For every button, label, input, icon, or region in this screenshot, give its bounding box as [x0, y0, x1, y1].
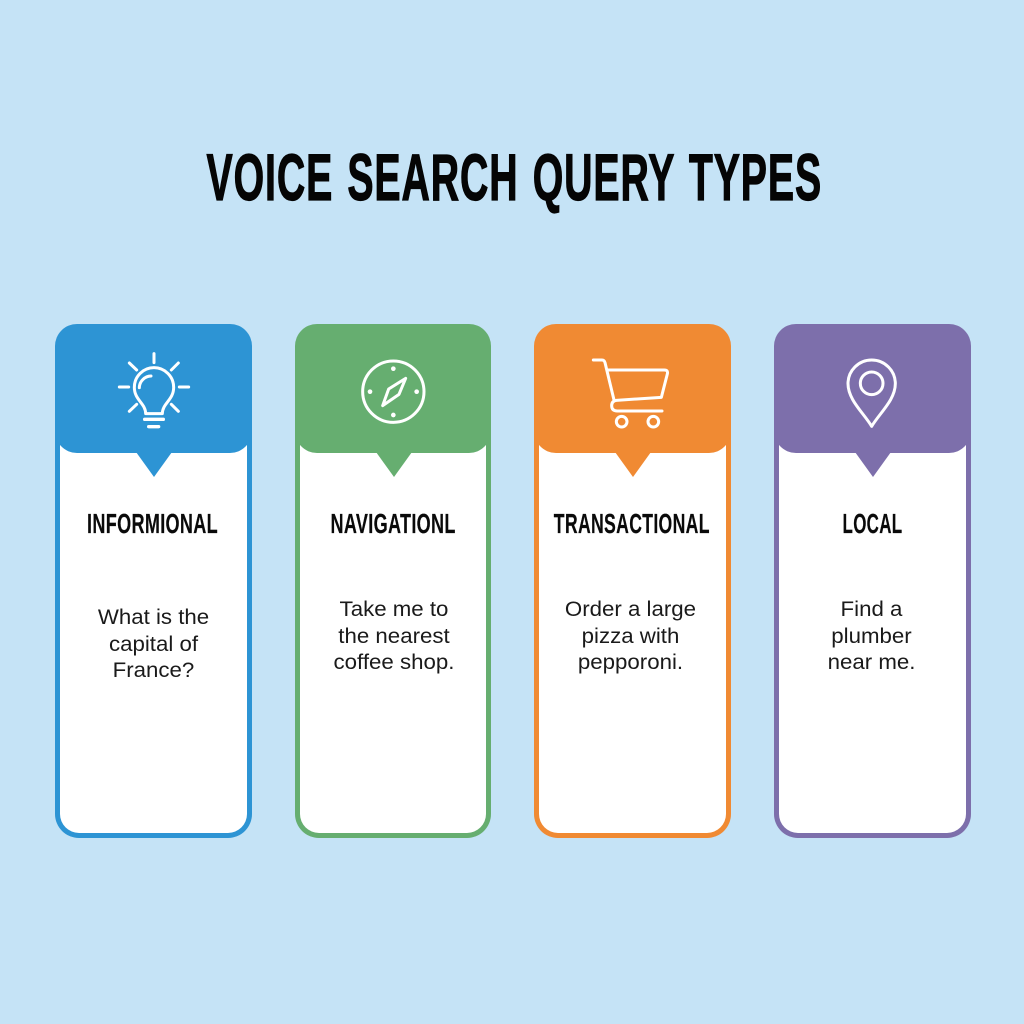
example text: the nearest [338, 625, 450, 648]
example text [565, 598, 696, 674]
panel: transactional [534, 324, 731, 838]
label: local: LOCAL [843, 508, 902, 539]
panel: informational [55, 324, 252, 838]
example text: Find a [841, 598, 902, 621]
label: navigationl: NAVIGATIONL [331, 508, 456, 539]
example text: coffee shop. [334, 651, 454, 674]
example text [98, 606, 209, 682]
icon: shopping cart [592, 358, 669, 428]
example text [828, 598, 915, 674]
icon: map pin [846, 358, 897, 428]
panel: navigational [295, 324, 491, 838]
icon: compass [361, 360, 426, 424]
label: transactional: TRANSACTIONAL [554, 508, 709, 539]
example text: France? [113, 659, 194, 682]
example text: Take me to [340, 598, 448, 621]
icon: light bulb [118, 352, 190, 428]
example text: pepporoni. [578, 651, 683, 674]
title: VOICE SEARCH QUERY TYPES [206, 140, 822, 214]
example text: plumber [831, 625, 912, 648]
example text: near me. [828, 651, 915, 674]
example text [334, 598, 454, 674]
example text: What is the [98, 606, 209, 629]
example text: pizza with [582, 625, 679, 648]
panel: local [774, 324, 971, 838]
example text: Order a large [565, 598, 696, 621]
example text: capital of [109, 633, 198, 656]
label: informional: INFORMIONAL [87, 508, 218, 539]
